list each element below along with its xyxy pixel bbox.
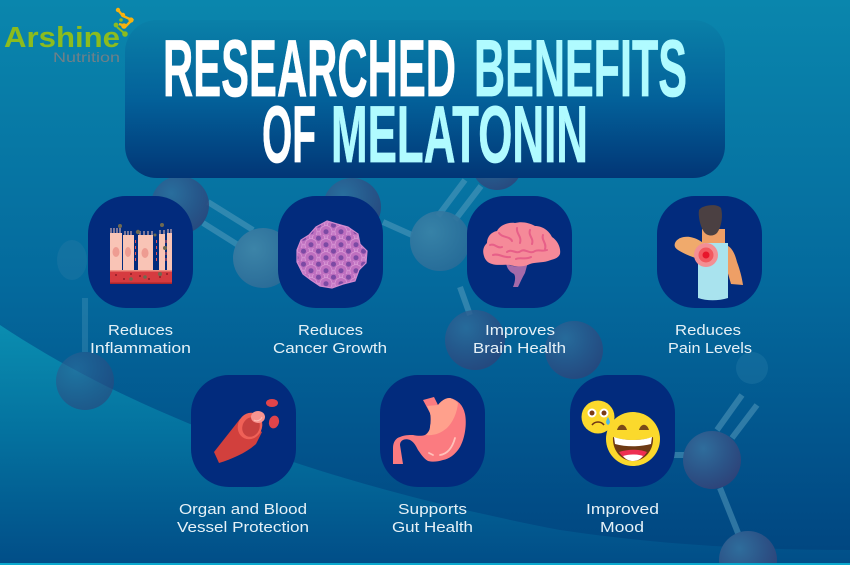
panel: improved mood (570, 375, 675, 536)
label: improved mood (586, 501, 659, 536)
label: reduces cancer growth (273, 322, 387, 357)
label: improves brain health (473, 322, 566, 357)
panel: reduces cancer growth (273, 196, 387, 357)
label: reduces cancer growth: Cancer Growth (273, 340, 387, 357)
label: improves brain health: Improves (485, 322, 555, 339)
label: organ and blood vessel protection: Organ and Blood (179, 501, 307, 518)
label: improved mood: Improved (586, 501, 659, 518)
title: RESEARCHED (163, 24, 456, 114)
panel: title (125, 20, 725, 180)
icon: blood vessel (214, 399, 281, 463)
panel: supports gut health (380, 375, 485, 536)
label: organ and blood vessel protection (177, 501, 309, 536)
panel: organ and blood vessel protection (177, 375, 309, 536)
label: reduces pain levels: Reduces (675, 322, 741, 339)
title: OF (262, 90, 316, 180)
label: supports gut health: Gut Health (392, 519, 473, 536)
label: reduces pain levels (668, 322, 752, 357)
lower arc band (0, 325, 850, 565)
label: improved mood: Mood (600, 519, 644, 536)
label: reduces inflammation: Inflammation (90, 340, 191, 357)
title: MELATONIN (331, 90, 588, 180)
panel: improves brain health (467, 196, 572, 357)
icon: stomach (393, 397, 466, 464)
icon: cancer cell cluster (297, 221, 367, 288)
icon: sad and happy emoji (582, 400, 660, 466)
panel: reduces pain levels (657, 196, 762, 357)
label: organ and blood vessel protection: Vessel Protection (177, 519, 309, 536)
panel: reduces inflammation (88, 196, 193, 357)
overlapping molecule balls (56, 352, 777, 565)
label: reduces inflammation: Reduces (108, 322, 173, 339)
label: supports gut health: Supports (398, 501, 467, 518)
icon: back pain figure (675, 205, 743, 300)
label: reduces inflammation (90, 322, 191, 357)
logo wordmark: Arshine (4, 22, 120, 54)
icon: intestinal cells (110, 223, 172, 284)
bottom edge line (0, 563, 850, 565)
icon: brain (483, 222, 560, 287)
label: supports gut health (392, 501, 473, 536)
label: reduces cancer growth: Reduces (298, 322, 363, 339)
logo subtitle: Nutrition (53, 49, 120, 65)
label: reduces pain levels: Pain Levels (668, 340, 752, 357)
logo (4, 8, 134, 65)
background molecule (57, 140, 768, 533)
icon: logo molecule (114, 8, 134, 37)
label: improves brain health: Brain Health (473, 340, 566, 357)
title (163, 24, 687, 180)
